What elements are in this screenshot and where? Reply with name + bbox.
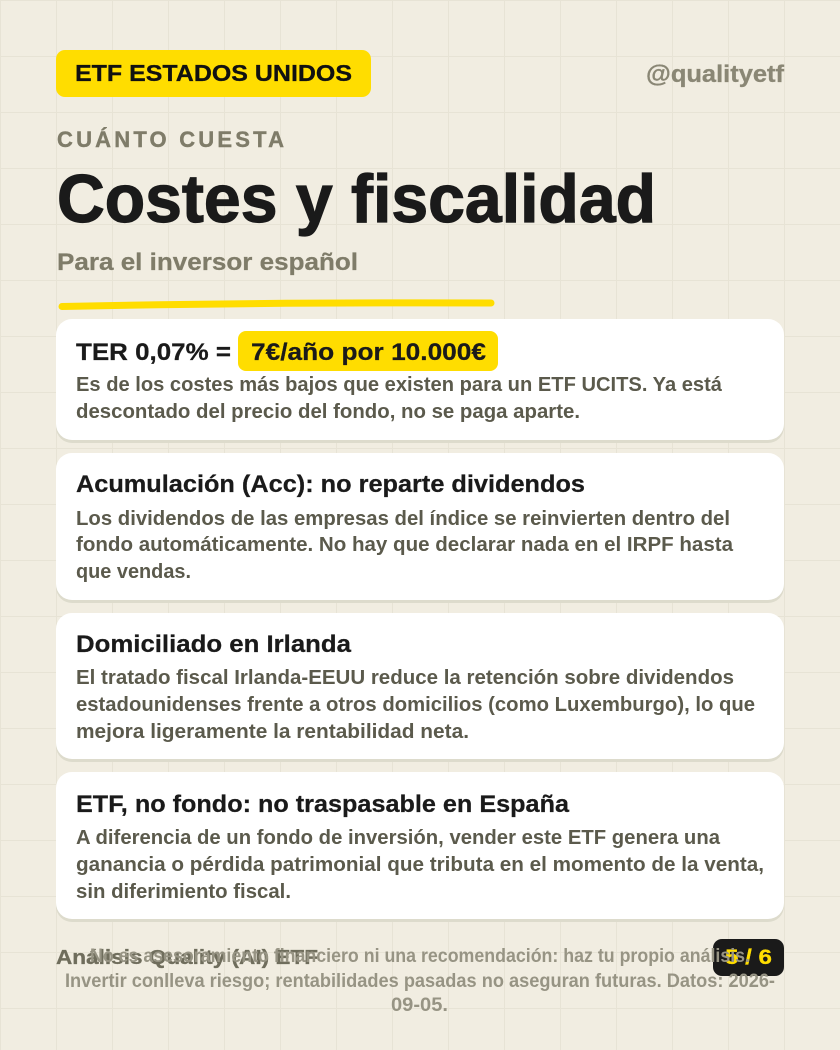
card: Domiciliado en Irlanda bbox=[56, 613, 784, 762]
card body: TER bbox=[76, 374, 723, 423]
card heading: Acumulación: Acumulación (Acc): no reparte dividendos bbox=[76, 471, 585, 498]
card heading: ETF, no fondo: ETF, no fondo: no traspasable en España bbox=[76, 791, 569, 818]
card body: Domiciliado: mejora ligeramente la rentabilidad neta. bbox=[76, 721, 469, 743]
card body: TER: Es de los costes más bajos que existen para un ETF UCITS. Ya está bbox=[76, 374, 723, 396]
eyebrow: CUÁNTO CUESTA bbox=[57, 127, 284, 152]
card body: ETF, no fondo bbox=[76, 827, 764, 903]
tag: ETF Estados Unidos bbox=[56, 50, 371, 97]
handle: @qualityetf bbox=[646, 61, 785, 88]
card body: ETF, no fondo: ganancia o pérdida patrimonial que tributa en el momento de la venta, bbox=[76, 854, 764, 876]
card: Acumulación bbox=[56, 453, 784, 603]
tag: ETF Estados Unidos: ETF ESTADOS UNIDOS bbox=[75, 60, 352, 86]
card: ETF, no fondo bbox=[56, 772, 784, 922]
disclaimer bbox=[65, 945, 775, 1016]
card body: Acumulación bbox=[76, 508, 734, 583]
footer label: Análisis Quality (AI) ETF bbox=[56, 946, 318, 969]
card body: Domiciliado: El tratado fiscal Irlanda-EEUU reduce la retención sobre dividendos bbox=[76, 667, 734, 689]
disclaimer: Invertir conlleva riesgo; rentabilidades pasadas no aseguran futuras. Datos: 2026- bbox=[65, 970, 775, 992]
highlight: 7€/año por 10.000€ bbox=[238, 331, 498, 371]
page badge: 5 / 6 bbox=[725, 946, 772, 969]
card body: Acumulación: fondo automáticamente. No hay que declarar nada en el IRPF hasta bbox=[76, 534, 734, 556]
disclaimer: No es asesoramiento financiero ni una recomendación: haz tu propio análisis. bbox=[90, 945, 750, 967]
card heading: Domiciliado: Domiciliado en Irlanda bbox=[76, 631, 351, 658]
card body: TER: descontado del precio del fondo, no se paga aparte. bbox=[76, 401, 580, 423]
card body: ETF, no fondo: sin diferimiento fiscal. bbox=[76, 881, 291, 903]
card: TER bbox=[56, 319, 784, 443]
card body: Acumulación: Los dividendos de las empresas del índice se reinvierten dentro del bbox=[76, 508, 730, 530]
card body: ETF, no fondo: A diferencia de un fondo de inversión, vender este ETF genera una bbox=[76, 827, 721, 849]
title: Costes y fiscalidad bbox=[57, 161, 656, 237]
yellow underline bbox=[62, 303, 491, 306]
card heading: TER 0,07%: TER 0,07% = bbox=[76, 339, 231, 366]
highlight: 7€/año por 10.000€: 7€/año por 10.000€ bbox=[251, 339, 486, 366]
card body: Acumulación: que vendas. bbox=[76, 561, 191, 583]
card body: Domiciliado: estadounidenses frente a otros domicilios (como Luxemburgo), lo que bbox=[76, 694, 755, 716]
card body: Domiciliado bbox=[76, 667, 755, 743]
page badge bbox=[713, 939, 784, 976]
subtitle: Para el inversor español bbox=[57, 249, 358, 276]
disclaimer: 09-05. bbox=[391, 994, 448, 1016]
